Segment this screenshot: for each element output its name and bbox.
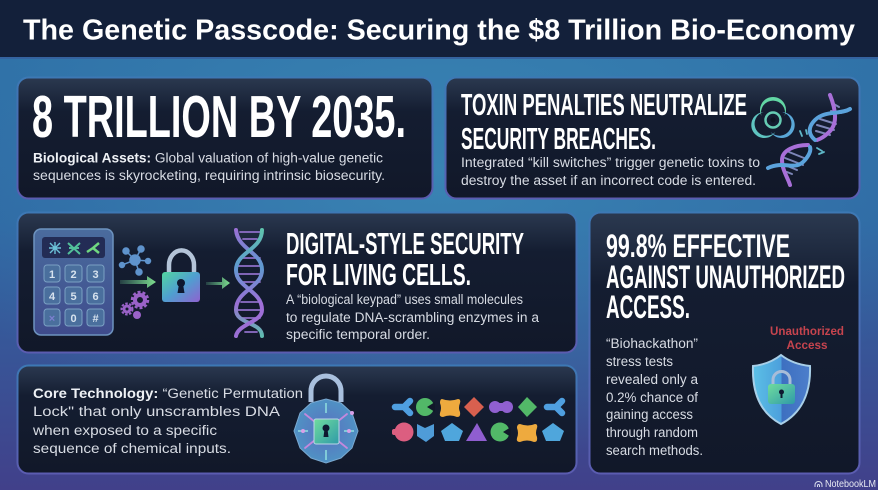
heading: digital-style security: FOR LIVING CELLS. — [286, 257, 471, 292]
icon: biological keypad: 6 — [92, 291, 99, 303]
heading: toxin penalties — [461, 87, 747, 156]
body text: biological keypad: A “biological keypad” uses small molecules — [286, 292, 523, 307]
icon: biohazard — [747, 97, 799, 143]
icon: molecule — [120, 246, 150, 275]
body text: biohackathon: gaining access — [606, 407, 693, 422]
heading: toxin penalties: SECURITY BREACHES. — [461, 121, 656, 156]
icon: biological keypad: 0 — [70, 313, 77, 325]
icon: gears — [122, 292, 148, 319]
body text: core technology: when exposed to a specific — [32, 423, 217, 438]
heading: 8 trillion: 8 TRILLION BY 2035. — [32, 84, 406, 150]
icon: biological keypad — [34, 229, 113, 335]
body text: biohackathon: stress tests — [606, 354, 673, 369]
heading: 99.8% effective — [606, 228, 845, 325]
body text: biological assets: Biological Assets: Global valuation of high-value genetic — [33, 150, 383, 166]
body text: core technology — [32, 386, 303, 456]
body text: biological assets — [33, 150, 385, 183]
body text: biohackathon: “Biohackathon” — [606, 336, 698, 351]
icon: broken DNA — [768, 95, 850, 185]
body text: biohackathon — [606, 336, 703, 458]
body text: core technology: Lock" that only unscrambles DNA — [33, 404, 280, 419]
title: The Genetic Passcode: Securing the $8 Trillion Bio-Economy — [23, 14, 855, 46]
icon: biological keypad: 3 — [92, 269, 99, 281]
icon: shield with lock — [753, 355, 810, 424]
panel: core technology — [18, 366, 576, 474]
panel: toxin penalties — [446, 78, 860, 198]
icon: biological keypad: 4 — [49, 291, 56, 303]
body text: kill switches: destroy the asset if an incorrect code is entered. — [461, 173, 756, 188]
body text: core technology: Core Technology: “Genetic Permutation — [33, 386, 303, 401]
label: unauthorized access: Unauthorized — [770, 324, 844, 338]
heading: 99.8% effective: 99.8% EFFECTIVE — [606, 228, 790, 264]
title bar — [0, 0, 878, 58]
panel: effectiveness — [590, 212, 860, 474]
body text: biohackathon: search methods. — [606, 443, 703, 458]
icon: biological keypad: 1 — [49, 269, 55, 281]
arrow: lock to DNA — [206, 277, 230, 289]
body text: biohackathon: revealed only a — [606, 372, 698, 387]
body text: biohackathon: 0.2% chance of — [606, 390, 698, 405]
body text: kill switches — [461, 155, 760, 188]
label: unauthorized access — [770, 324, 844, 352]
label: unauthorized access: Access — [786, 338, 828, 352]
body text: kill switches: Integrated “kill switches” trigger genetic toxins to — [461, 155, 760, 170]
icon: permutation lock — [294, 376, 358, 463]
body text: biohackathon: through random — [606, 425, 698, 440]
heading: 99.8% effective: ACCESS. — [606, 289, 690, 325]
icon group: chemical input shapes — [392, 397, 564, 442]
icon: biological keypad: × — [49, 313, 55, 325]
icon: DNA helix — [236, 230, 262, 336]
heading: digital-style security — [286, 226, 524, 292]
heading: digital-style security: DIGITAL-STYLE SECURITY — [286, 226, 524, 261]
icon: biological keypad: # — [92, 313, 99, 325]
body text: biological assets: sequences is skyrocketing, requiring intrinsic biosecurity. — [33, 168, 385, 183]
body text: core technology: sequence of chemical inputs. — [33, 441, 231, 456]
panel: digital-style security — [18, 212, 576, 352]
arrow: keypad to lock — [120, 276, 156, 288]
panel: market valuation — [18, 78, 432, 198]
icon: biological keypad: 5 — [70, 291, 77, 303]
body text: biological keypad: to regulate DNA-scrambling enzymes in a — [286, 310, 539, 325]
body text: biological keypad: specific temporal order. — [286, 327, 430, 342]
icon: padlock — [162, 250, 200, 302]
icon: biological keypad: 2 — [70, 269, 77, 281]
body text: biological keypad — [286, 292, 539, 342]
